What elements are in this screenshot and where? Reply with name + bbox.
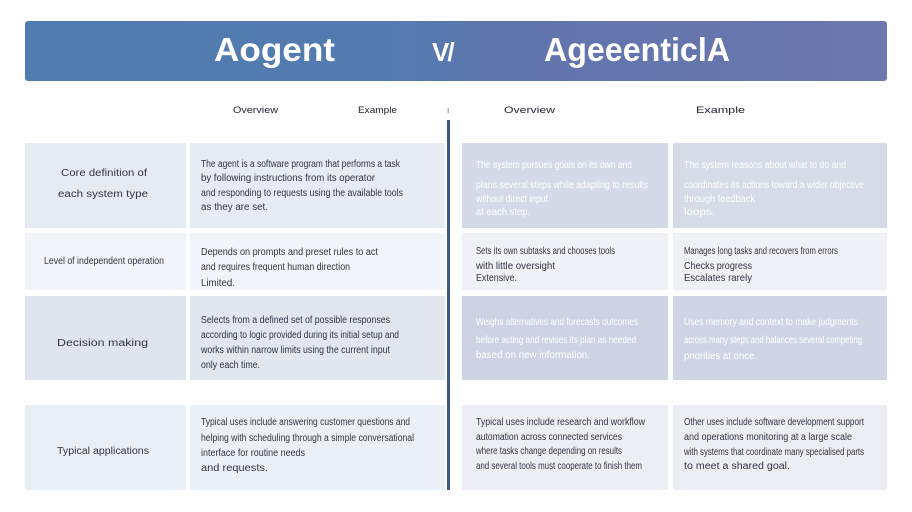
row 3 right cell B bbox=[673, 296, 887, 380]
row 4 right cell A bbox=[462, 405, 668, 490]
column headings: Example bbox=[358, 105, 397, 116]
row 1 left cell bbox=[190, 143, 445, 228]
row 4 text: Typical uses include answering customer questions and bbox=[201, 417, 410, 428]
row 2 right cell B bbox=[673, 233, 887, 290]
row 4 label cell bbox=[25, 405, 186, 490]
row 4 text: where tasks change depending on results bbox=[475, 446, 622, 457]
row 4 text: Typical uses include research and workflow bbox=[476, 417, 646, 428]
row 1 text: coordinates its actions toward a wider objective bbox=[684, 180, 864, 191]
row 2 bbox=[25, 233, 887, 290]
column headings: Overview bbox=[233, 105, 278, 116]
row 4 text: to meet a shared goal. bbox=[684, 461, 790, 472]
row 2 label cell bbox=[25, 233, 186, 290]
row 1 text: without direct input bbox=[475, 194, 548, 205]
row 2 text: and requires frequent human direction bbox=[201, 262, 350, 273]
versus mark: V/ bbox=[432, 37, 454, 67]
row 2 text: Sets its own subtasks and chooses tools bbox=[476, 246, 615, 257]
row 1 text bbox=[58, 159, 864, 218]
row 3 text: based on new information. bbox=[476, 350, 590, 361]
row 3 right cell A bbox=[462, 296, 668, 380]
row 4 text: interface for routine needs bbox=[201, 448, 305, 459]
row 1 text: and responding to requests using the available tools bbox=[201, 188, 403, 199]
row 2 text: Manages long tasks and recovers from errors bbox=[684, 246, 838, 257]
row 1 right cell B bbox=[673, 143, 887, 228]
row 2 text: Level of independent operation bbox=[44, 256, 164, 267]
row 3 text: across many steps and balances several competing bbox=[684, 335, 862, 346]
title: right: AgeeenticlA bbox=[544, 31, 730, 68]
row 2 text bbox=[44, 246, 838, 289]
row 4 text: Other uses include software development support bbox=[684, 417, 864, 428]
row 4 left cell bbox=[190, 405, 445, 490]
row 4 text: with systems that coordinate many specialised parts bbox=[683, 447, 864, 458]
row 3 text: works within narrow limits using the current input bbox=[200, 345, 390, 356]
row 2 text: Limited. bbox=[201, 278, 235, 289]
row 1 text: Core definition of bbox=[61, 168, 147, 179]
row 3 label cell bbox=[25, 296, 186, 380]
row 1 text: through feedback bbox=[684, 194, 756, 205]
row 1 text: as they are set. bbox=[201, 202, 268, 213]
row 2 text: with little oversight bbox=[475, 261, 555, 272]
row 2 text: Escalates rarely bbox=[684, 273, 752, 284]
row 1 text: by following instructions from its operator bbox=[201, 173, 376, 184]
row 1 text: loops. bbox=[684, 207, 715, 218]
row 1 text: at each step. bbox=[476, 207, 530, 218]
header banner bbox=[25, 21, 887, 81]
row 3 left cell bbox=[190, 296, 445, 380]
row 1 text: The agent is a software program that performs a task bbox=[201, 159, 401, 170]
row 4 text: and operations monitoring at a large scale bbox=[684, 432, 852, 443]
row 3 text: Weighs alternatives and forecasts outcomes bbox=[476, 317, 638, 328]
row 1 text: The system reasons about what to do and bbox=[684, 160, 846, 171]
row 1 bbox=[25, 143, 887, 228]
row 2 text: Depends on prompts and preset rules to act bbox=[201, 247, 378, 258]
column headings: Example bbox=[696, 105, 745, 116]
center divider bbox=[447, 108, 450, 490]
row 1 text: each system type bbox=[58, 189, 149, 200]
row 1 text: The system pursues goals on its own and bbox=[476, 160, 632, 171]
row 4 text: and several tools must cooperate to finish them bbox=[476, 461, 642, 472]
row 1 label cell bbox=[25, 143, 186, 228]
row 3 text: before acting and revises its plan as needed bbox=[476, 335, 636, 346]
row 2 text: Checks progress bbox=[684, 261, 752, 272]
row 4 bbox=[25, 405, 887, 490]
column headings bbox=[233, 105, 745, 116]
row 2 text: Extensive. bbox=[476, 273, 517, 284]
row 4 text: and requests. bbox=[201, 463, 268, 474]
row 3 text bbox=[57, 315, 862, 371]
row 1 right cell A bbox=[462, 143, 668, 228]
column headings: Overview bbox=[504, 105, 555, 116]
row 4 text: Typical applications bbox=[57, 446, 149, 457]
row 1 text: plans several steps while adapting to results bbox=[476, 180, 648, 191]
row 4 text: automation across connected services bbox=[476, 432, 622, 443]
row 4 text bbox=[57, 417, 864, 474]
row 2 left cell bbox=[190, 233, 445, 290]
row 3 bbox=[25, 296, 887, 380]
row 4 text: helping with scheduling through a simple conversational bbox=[201, 433, 414, 444]
title: left: Aogent bbox=[214, 31, 335, 68]
row 2 right cell A bbox=[462, 233, 668, 290]
row 3 text: Decision making bbox=[57, 338, 148, 349]
row 4 right cell B bbox=[673, 405, 887, 490]
row 3 text: priorities at once. bbox=[684, 351, 757, 362]
row 3 text: Selects from a defined set of possible responses bbox=[201, 315, 390, 326]
row 3 text: according to logic provided during its initial setup and bbox=[201, 330, 399, 341]
row 3 text: Uses memory and context to make judgments bbox=[684, 317, 858, 328]
row 3 text: only each time. bbox=[201, 360, 260, 371]
